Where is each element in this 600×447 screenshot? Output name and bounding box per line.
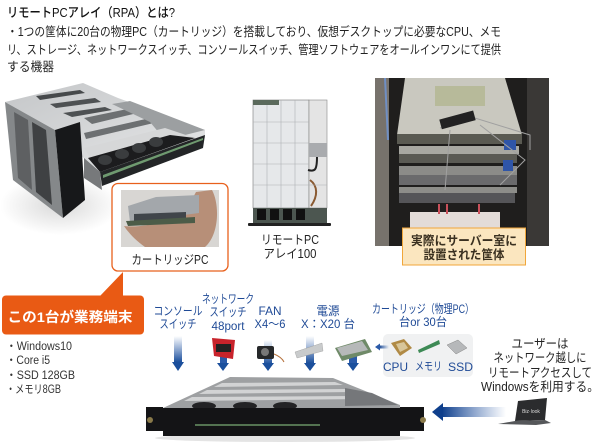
description text: [7, 24, 501, 74]
labels: CPU, memory, SSD: [383, 361, 473, 374]
component labels: FAN: [258, 304, 282, 318]
user description text: ユーザーは: [512, 337, 568, 351]
callout: installed in server room: 設置された筐体: [424, 247, 505, 262]
arrow: components to cartridge: [375, 344, 389, 350]
icon: laptop: [498, 398, 551, 425]
cartridge specs list: [6, 341, 75, 396]
label: Remote PC Array 100: リモートPC: [261, 233, 319, 247]
component labels: スイッチ: [210, 305, 246, 319]
component labels: 台or 30台: [399, 314, 447, 329]
cartridge specs list: ・メモリ8GB: [6, 384, 61, 396]
component labels: X4～6: [254, 317, 286, 331]
orange label: this one unit is a business terminal: この1台が業務端末: [8, 309, 132, 325]
icon: fan: [257, 346, 284, 362]
component labels: X：X20 台: [301, 316, 355, 331]
cartridge specs list: ・Core i5: [6, 355, 50, 367]
cartridge specs list: ・Windows10: [6, 341, 72, 353]
title: リモートPCアレイ（RPA）とは?: [7, 5, 175, 20]
arrow: console switch: [172, 336, 184, 371]
photo: Remote PC Array 100 top view: [248, 100, 331, 226]
photo: server rack: [375, 78, 549, 246]
component labels: 電源: [316, 304, 340, 318]
orange label: this one unit is a business terminal: [2, 272, 144, 334]
component labels: 48port: [212, 319, 245, 333]
cartridge photo: [121, 190, 219, 247]
component labels: ネットワーク: [202, 292, 254, 306]
cartridge PC callout box: [112, 184, 228, 271]
labels: CPU, memory, SSD: CPU: [383, 362, 408, 374]
bottom server chassis: [146, 377, 426, 442]
component labels: [154, 292, 474, 333]
description text: する機器: [7, 60, 54, 74]
panel: cartridge components: [383, 334, 473, 377]
arrow: laptop to server: [432, 403, 506, 421]
component labels: コンソール: [154, 304, 202, 318]
photo: RPA chassis with cartridges: [0, 83, 205, 235]
description text: リ、ストレージ、ネットワークスイッチ、コンソールスイッチ、管理ソフトウェアをオールインワンにて提供: [7, 42, 501, 57]
icon: CPU: [391, 339, 412, 356]
arrow: network switch: [217, 350, 229, 371]
icon: power supply: [295, 343, 323, 358]
callout: installed in server room: [402, 228, 526, 265]
arrow: cartridge: [347, 355, 359, 371]
cartridge PC callout box: カートリッジPC: [132, 253, 208, 267]
arrow: power supply: [304, 336, 316, 371]
label: Remote PC Array 100: アレイ100: [264, 247, 317, 261]
label: Remote PC Array 100: [261, 233, 319, 261]
callout: installed in server room: 実際にサーバー室に: [411, 233, 517, 248]
user description text: [481, 337, 599, 394]
icon: laptop: Biz·look: [522, 409, 540, 415]
component labels: スイッチ: [160, 317, 196, 331]
description text: ・1つの筐体に20台の物理PC（カートリッジ）を搭載しており、仮想デスクトップに必要なCPU、メモ: [7, 24, 501, 39]
icon: SSD: [447, 340, 467, 354]
cartridge specs list: ・SSD 128GB: [6, 370, 75, 382]
arrow: fan: [262, 340, 274, 371]
icon: memory: [418, 340, 440, 353]
labels: CPU, memory, SSD: メモリ: [415, 361, 442, 373]
component labels: カートリッジ（物理PC）: [372, 302, 474, 316]
labels: CPU, memory, SSD: SSD: [448, 362, 473, 374]
icon: cartridge: [335, 339, 372, 361]
icon: network switch chip: [212, 338, 235, 359]
